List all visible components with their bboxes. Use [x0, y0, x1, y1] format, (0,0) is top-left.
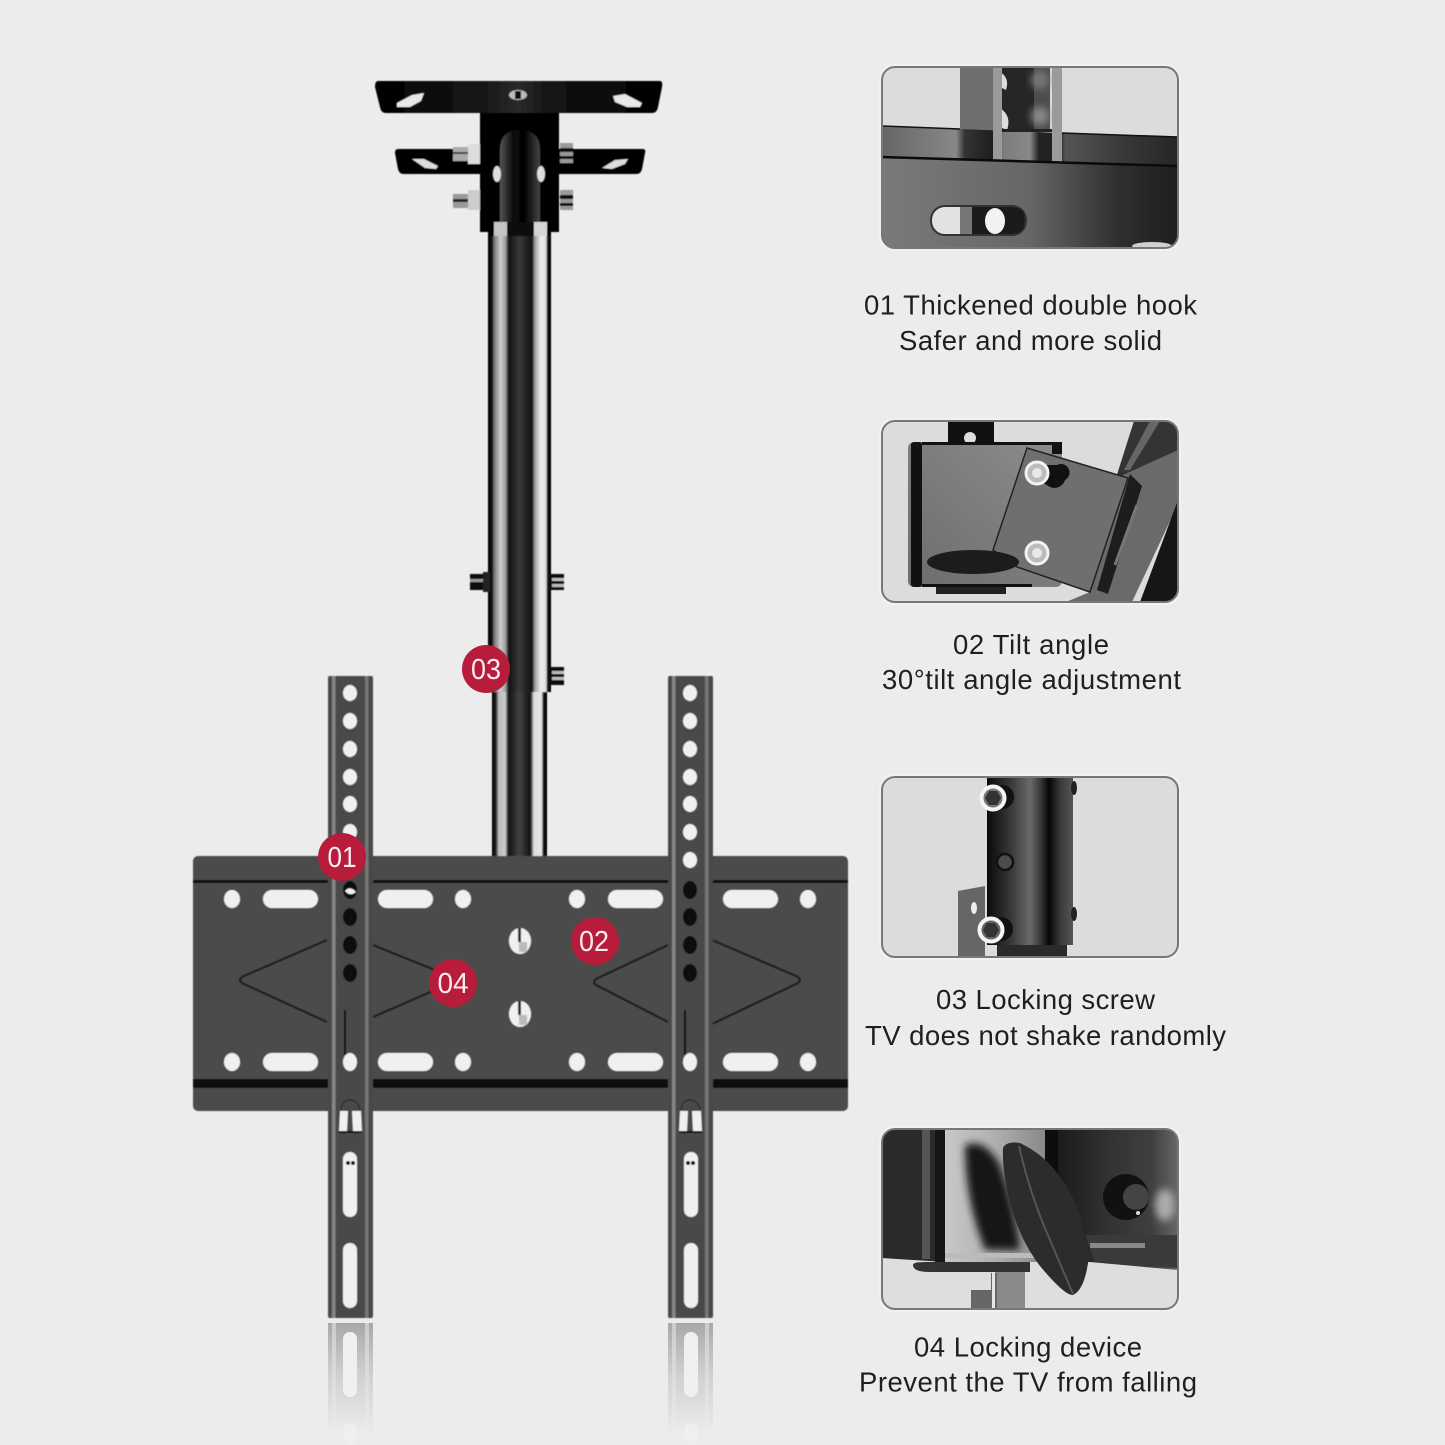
caption 01: Safer and more solid	[899, 325, 1162, 356]
badge 04	[429, 959, 477, 1007]
pivot bracket	[480, 113, 559, 236]
badge 02	[571, 917, 619, 965]
caption 04	[859, 1332, 1197, 1398]
upper telescopic pole	[488, 225, 551, 692]
top ceiling plate	[375, 81, 662, 113]
vertical rail right	[668, 676, 713, 1318]
side bolts	[453, 143, 573, 210]
panel: tilt angle detail	[879, 418, 1181, 605]
panel: locking device detail	[879, 1126, 1181, 1312]
locking screws on pole	[470, 572, 564, 685]
panel: locking screw detail	[879, 774, 1181, 960]
caption 04: Prevent the TV from falling	[859, 1366, 1197, 1398]
caption 02: 30°tilt angle adjustment	[882, 664, 1181, 695]
caption 02	[882, 629, 1181, 695]
caption 04: 04 Locking device	[914, 1332, 1142, 1362]
badge 03: 03	[471, 654, 501, 686]
caption 03: 03 Locking screw	[936, 984, 1155, 1015]
ceiling TV mount product	[193, 81, 848, 1318]
badge 01	[318, 833, 366, 881]
caption 03	[865, 984, 1226, 1051]
badge 01: 01	[328, 842, 356, 874]
lower telescopic pole	[492, 692, 547, 857]
badge 04: 04	[438, 968, 468, 1000]
caption 03: TV does not shake randomly	[865, 1020, 1226, 1051]
badge 02: 02	[579, 926, 609, 958]
caption 01	[864, 290, 1197, 356]
badge 03	[462, 645, 510, 693]
second ceiling plate	[395, 149, 645, 174]
panel: thickened double hook detail	[879, 64, 1181, 251]
horizontal wall plate	[193, 856, 848, 1111]
floor reflection of rails	[328, 1323, 713, 1445]
caption 02: 02 Tilt angle	[953, 629, 1109, 660]
vertical rail left	[328, 676, 373, 1318]
caption 01: 01 Thickened double hook	[864, 290, 1197, 320]
